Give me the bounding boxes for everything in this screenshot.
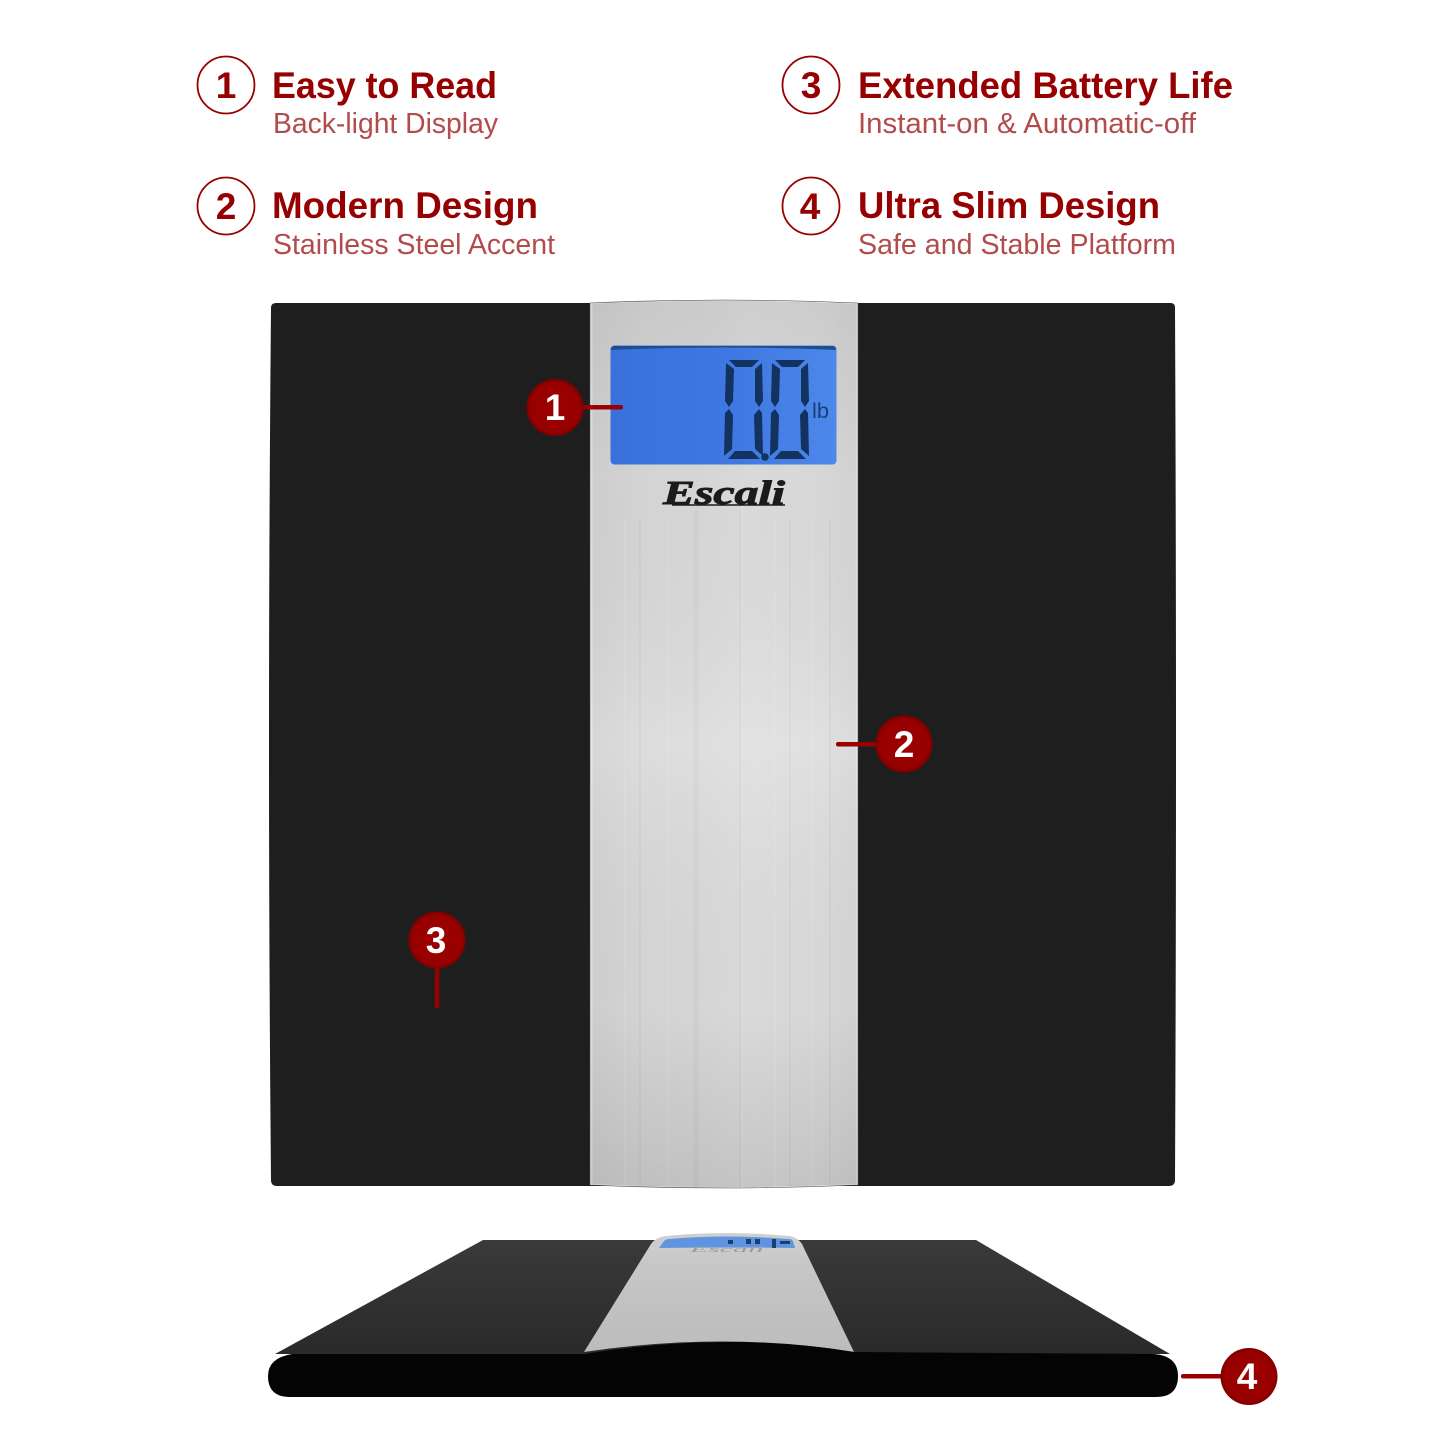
feature 1: easy to read: Easy to Read: [272, 65, 497, 106]
tiny LCD in perspective: Escali: [686, 1245, 764, 1254]
angled top surface: [275, 1240, 1170, 1354]
black platform: [269, 303, 1176, 1186]
callout 3: 3: [426, 920, 446, 961]
feature 2: modern design: Stainless Steel Accent: [273, 229, 555, 261]
LCD display: [610, 346, 836, 464]
callout 1: [526, 379, 623, 436]
callout 2: 2: [894, 724, 914, 765]
unit label: lb: [812, 400, 829, 423]
feature 1: easy to read: Back-light Display: [273, 108, 498, 140]
callout 2: [836, 716, 932, 772]
LCD reading 0.0: [724, 360, 809, 461]
Escali logo: Escali: [662, 475, 786, 512]
front edge: [268, 1342, 1178, 1397]
feature 1: easy to read: [198, 56, 498, 140]
feature 2: modern design: Modern Design: [272, 185, 538, 226]
feature 4: ultra slim design: Ultra Slim Design: [858, 185, 1160, 226]
scale top view: [269, 300, 1176, 1188]
scale side view: [268, 1233, 1178, 1397]
feature 1: easy to read: 1: [216, 65, 236, 106]
callout 3: [408, 912, 466, 1008]
feature 3: extended battery life: 3: [801, 65, 821, 106]
feature 4: ultra slim design: 4: [800, 186, 821, 227]
feature 2: modern design: 2: [216, 186, 236, 227]
steel strip in perspective: [584, 1233, 854, 1352]
feature 3: extended battery life: Instant-on & Automatic-off: [858, 108, 1197, 140]
callout 4: 4: [1237, 1356, 1258, 1397]
feature 4: ultra slim design: Safe and Stable Platform: [858, 229, 1176, 261]
tiny LCD in perspective: [659, 1236, 795, 1254]
feature 3: extended battery life: [782, 56, 1233, 140]
feature 4: ultra slim design: [782, 178, 1176, 261]
feature 3: extended battery life: Extended Battery Life: [858, 65, 1233, 106]
callout 1: 1: [545, 387, 565, 428]
stainless steel strip: [590, 300, 858, 1188]
feature 2: modern design: [198, 178, 555, 261]
Escali logo: [662, 475, 786, 512]
callout 4: [1181, 1348, 1278, 1405]
